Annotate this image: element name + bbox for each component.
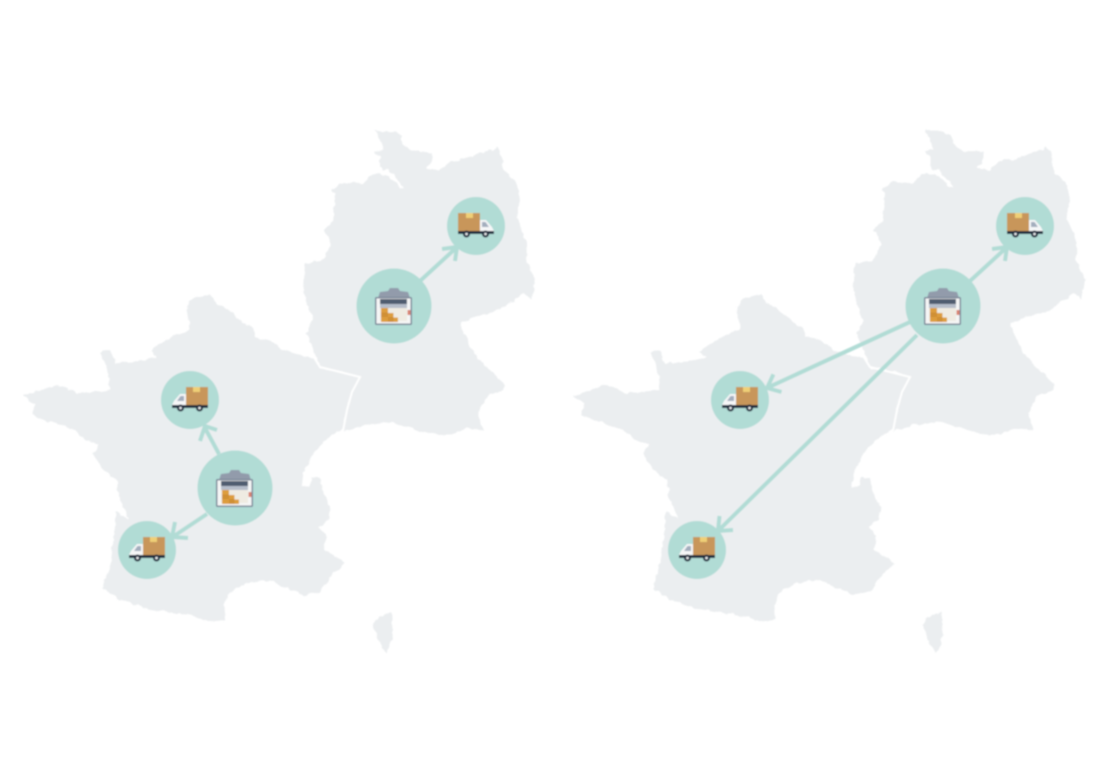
arrow: warehouse to south France truck xyxy=(172,514,207,538)
map: Germany xyxy=(303,129,535,435)
panel: left map xyxy=(23,129,535,654)
truck node: south France xyxy=(118,521,176,579)
warehouse node: Germany xyxy=(906,268,980,344)
truck node: south France xyxy=(668,521,726,579)
arrow: warehouse to Germany truck xyxy=(420,247,457,281)
arrow: warehouse to south France truck xyxy=(718,335,917,531)
arrow: warehouse to Germany truck xyxy=(970,247,1007,281)
warehouse node: France xyxy=(198,450,272,526)
truck node: north France xyxy=(161,371,219,429)
map: France xyxy=(573,294,943,654)
truck node: Germany xyxy=(996,197,1054,255)
arrow: warehouse to north France truck xyxy=(200,426,219,454)
truck node: Germany xyxy=(447,197,505,255)
panel: right map xyxy=(573,129,1085,654)
France-Germany border xyxy=(313,356,360,431)
map: France xyxy=(23,294,393,654)
arrow: warehouse to north France truck xyxy=(767,322,910,392)
map: Germany xyxy=(853,129,1085,435)
France-Germany border xyxy=(863,356,910,431)
warehouse node: Germany xyxy=(356,268,432,344)
truck node: north France xyxy=(711,371,769,429)
